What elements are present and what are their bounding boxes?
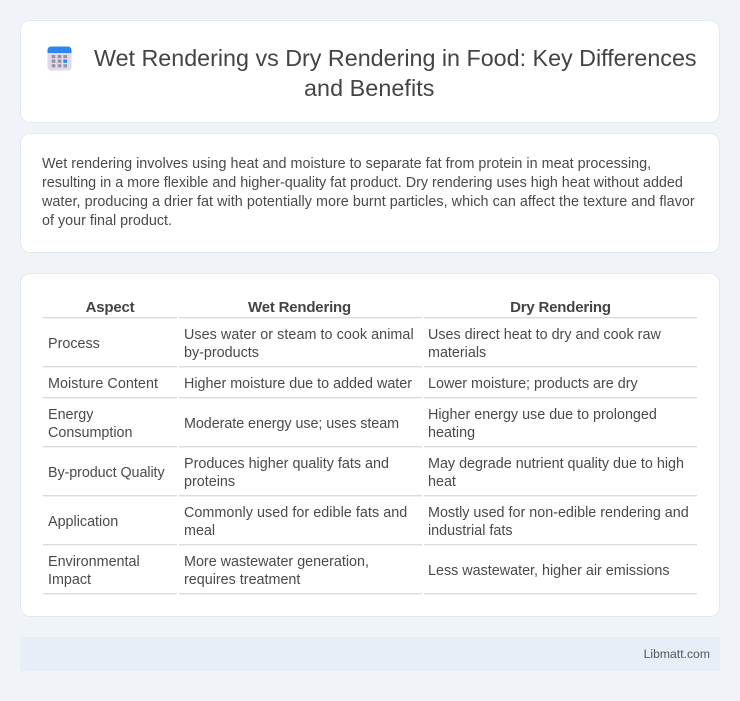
header panel	[20, 20, 720, 123]
footer credit: Libmatt.com	[644, 647, 710, 661]
row: Energy Consumption: Higher energy use due to prolonged	[428, 407, 657, 423]
table header: Aspect	[86, 299, 134, 316]
row: Moisture Content: Higher moisture due to added water	[184, 376, 412, 392]
table header	[86, 299, 611, 316]
row: By-product Quality: Produces higher quality fats and	[184, 456, 389, 472]
row: Application: industrial fats	[428, 523, 513, 539]
icon: calendar	[48, 46, 72, 70]
title	[94, 45, 697, 100]
row: Process: materials	[428, 345, 486, 361]
row: Energy Consumption: Moderate energy use; uses steam	[184, 416, 399, 432]
row: Environmental Impact: Impact	[48, 572, 91, 588]
row: Energy Consumption: Energy	[48, 407, 93, 423]
row: Energy Consumption: Consumption	[48, 425, 133, 441]
intro text: of your final product.	[42, 213, 172, 229]
row: Process: by-products	[184, 345, 259, 361]
intro text: water, producing a drier fat with potentially more burnt particles, which can affect the texture and flavor	[42, 194, 695, 210]
row: By-product Quality	[48, 456, 684, 490]
row: Moisture Content: Moisture Content	[48, 376, 158, 392]
intro panel	[20, 133, 720, 253]
row: Environmental Impact	[48, 554, 670, 588]
row: Moisture Content: Lower moisture; products are dry	[428, 376, 638, 392]
intro text	[42, 156, 695, 229]
row: Application	[48, 505, 689, 539]
row: Process	[48, 327, 661, 361]
row: Application: Commonly used for edible fats and	[184, 505, 407, 521]
row: By-product Quality: May degrade nutrient quality due to high	[428, 456, 684, 472]
row: Process: Process	[48, 336, 100, 352]
row: Application: Application	[48, 514, 118, 530]
row: Process: Uses water or steam to cook animal	[184, 327, 414, 343]
row: Environmental Impact: Less wastewater, higher air emissions	[428, 563, 670, 579]
row: Environmental Impact: requires treatment	[184, 572, 300, 588]
row: Application: Mostly used for non-edible rendering and	[428, 505, 689, 521]
row: By-product Quality: heat	[428, 474, 456, 490]
intro text: resulting in a more flexible and higher-quality fat product. Dry rendering uses high heat without added	[42, 175, 683, 191]
row: Environmental Impact: Environmental	[48, 554, 140, 570]
comparison table panel	[20, 273, 720, 617]
row: Energy Consumption: heating	[428, 425, 475, 441]
title: and Benefits	[304, 74, 434, 100]
row: Process: Uses direct heat to dry and cook raw	[428, 327, 661, 343]
title: Wet Rendering vs Dry Rendering in Food: Key Differences	[94, 45, 697, 71]
table header: Dry Rendering	[510, 299, 611, 316]
row: Energy Consumption	[48, 407, 657, 441]
intro text: Wet rendering involves using heat and moisture to separate fat from protein in meat processing,	[42, 156, 651, 172]
row: Moisture Content	[48, 376, 638, 392]
table header: Wet Rendering	[248, 299, 351, 316]
row: Environmental Impact: More wastewater generation,	[184, 554, 369, 570]
row: By-product Quality: proteins	[184, 474, 235, 490]
row: Application: meal	[184, 523, 215, 539]
footer bar	[20, 637, 720, 671]
row: By-product Quality: By-product Quality	[48, 465, 165, 481]
